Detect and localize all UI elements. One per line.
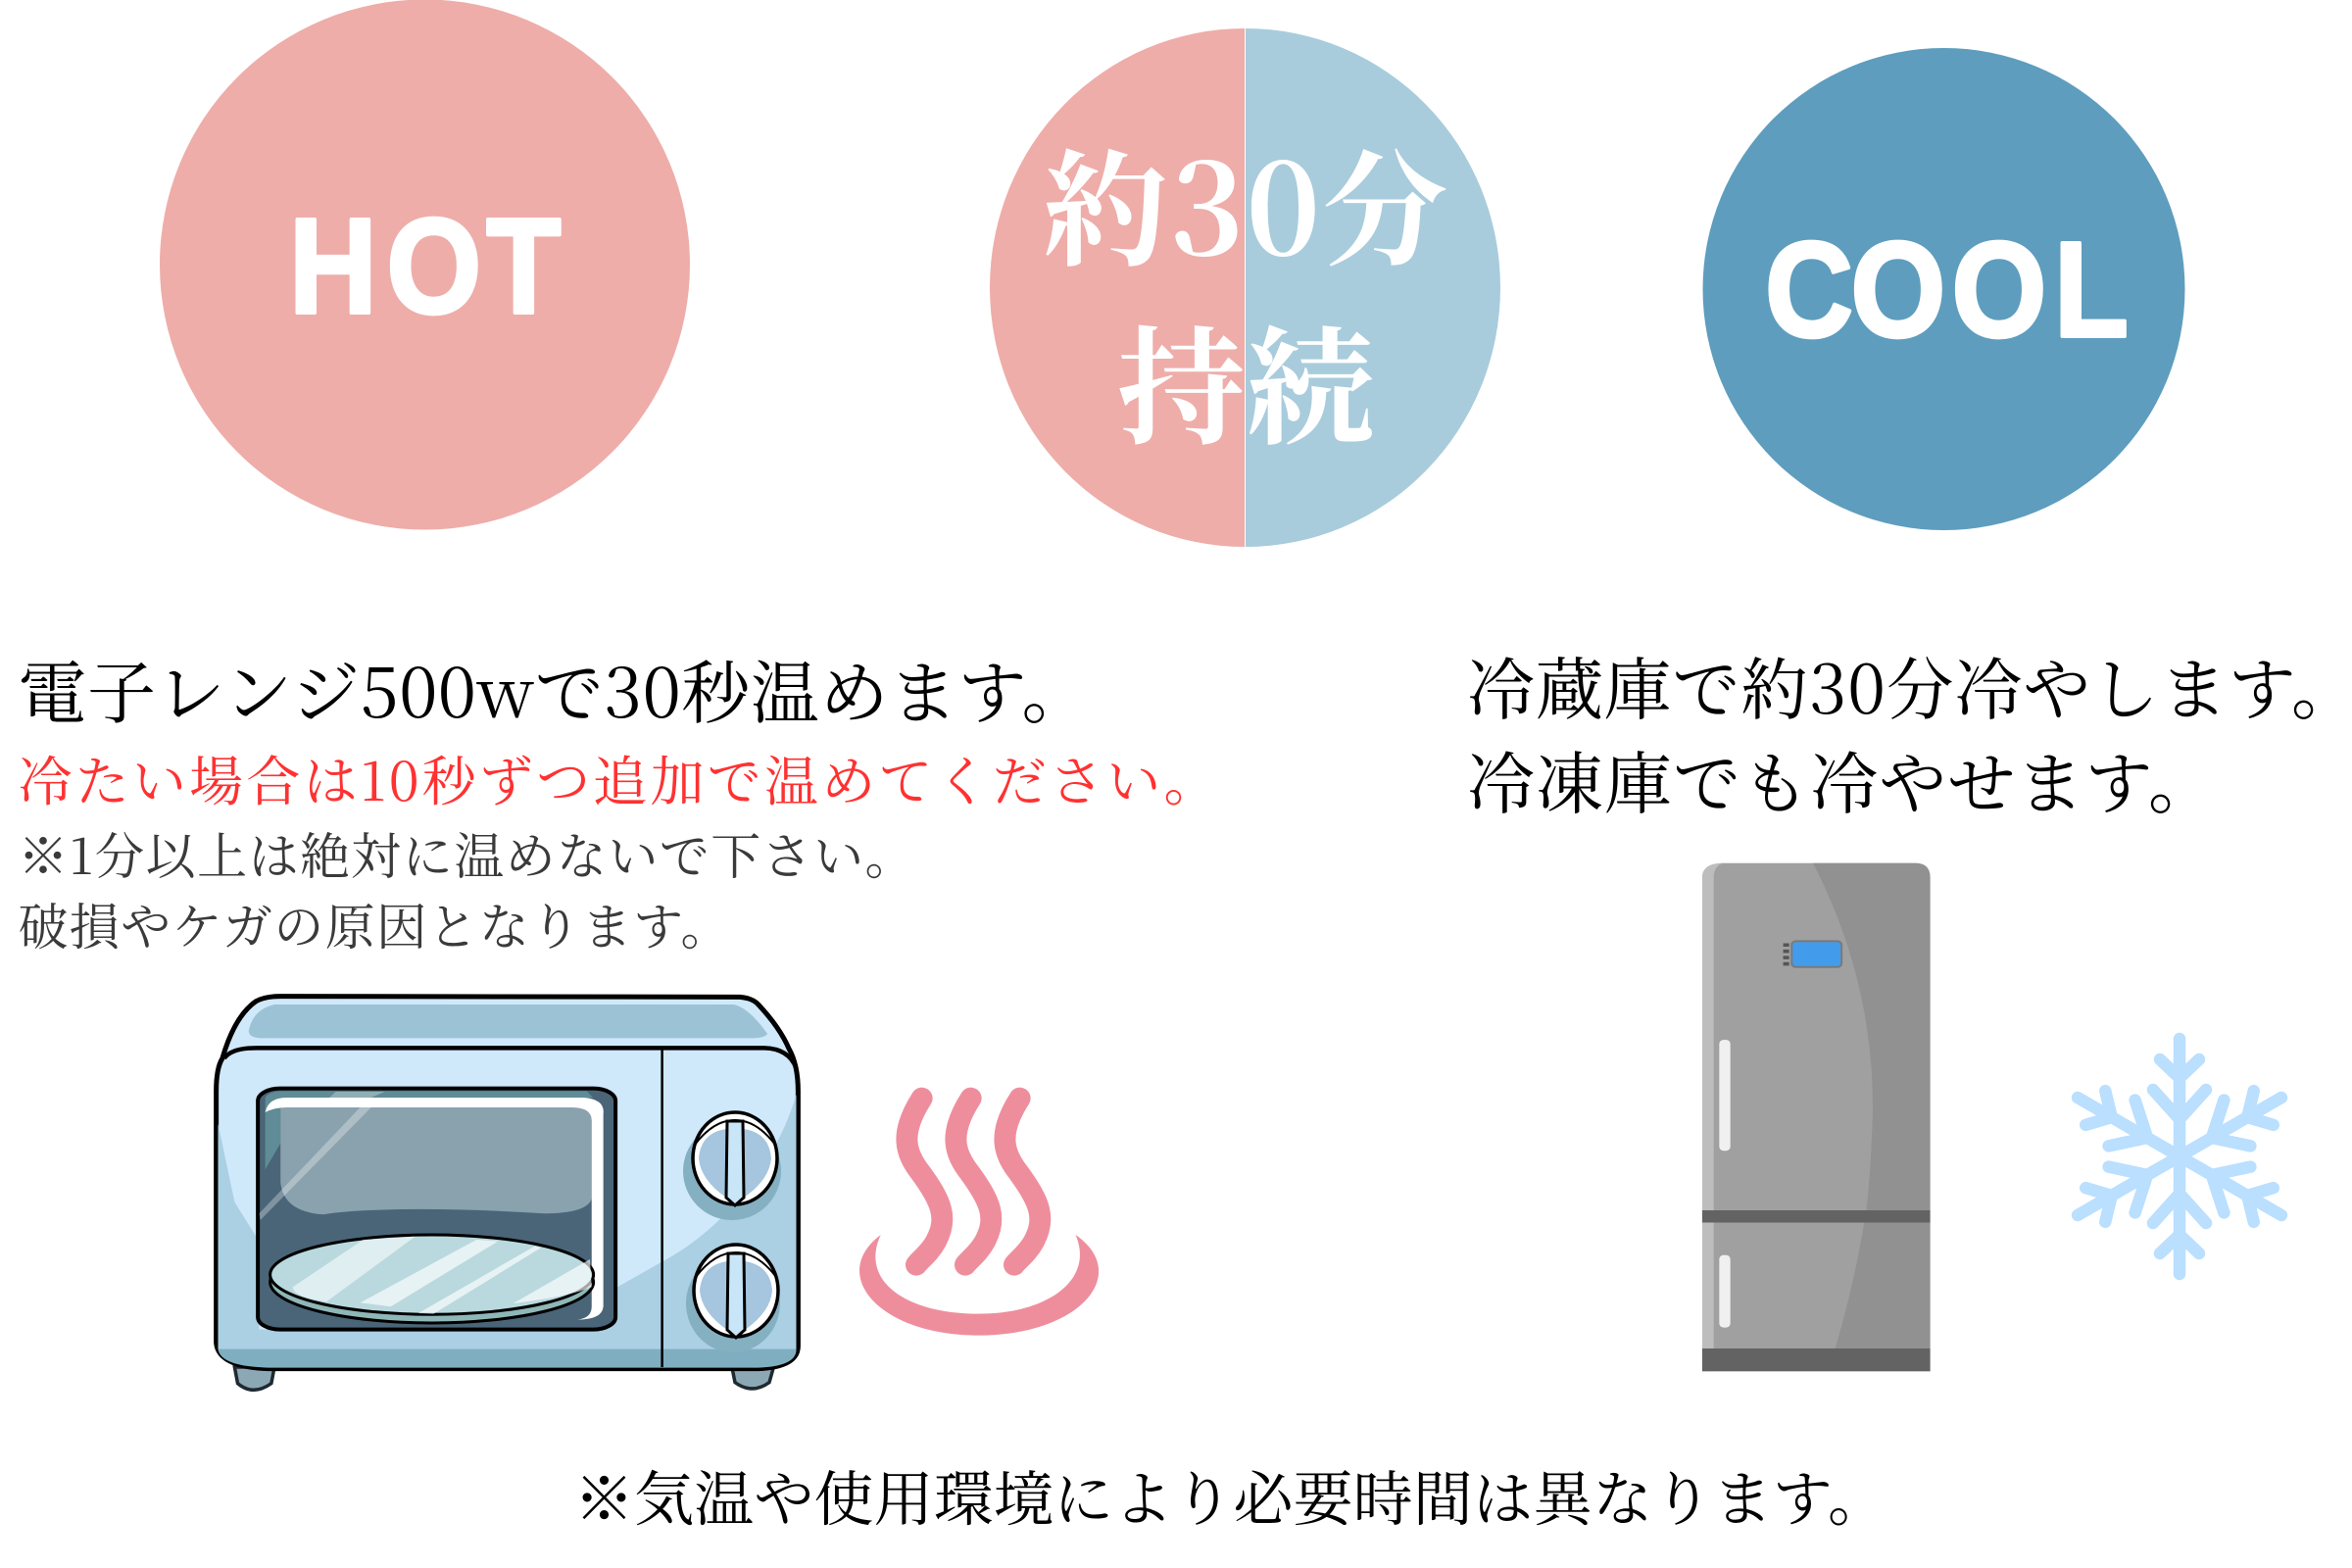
text block: heating instructions	[18, 639, 1217, 959]
badge: about 30 minutes duration: 約30分	[1043, 111, 1447, 291]
microwave body	[217, 997, 798, 1369]
microwave shading	[218, 1095, 796, 1349]
text block: cooling instructions	[1467, 636, 2352, 827]
microwave feet	[234, 1367, 773, 1390]
fridge bands	[1702, 1210, 1931, 1371]
badge: COOL	[1703, 48, 2185, 530]
microwave top panel	[249, 1004, 767, 1038]
badge: about 30 minutes duration	[990, 28, 1500, 547]
fridge body	[1702, 863, 1931, 1371]
text block: heating instructions: 冷たい場合は10秒ずつ追加で温めてください。	[18, 739, 1217, 816]
footnote: ※気温や使用環境により必要時間は異なります。	[574, 1452, 1887, 1538]
text block: cooling instructions: 冷蔵庫で約30分冷やします。	[1467, 636, 2352, 733]
text block: heating instructions: 電子レンジ500wで30秒温めます。	[18, 639, 1090, 738]
badge: about 30 minutes duration: 持続	[1117, 287, 1374, 470]
badge: COOL: COOL	[1765, 214, 2129, 365]
text block: cooling instructions: 冷凍庫でも冷やせます。	[1467, 730, 2216, 827]
icon: microwave oven	[217, 997, 798, 1390]
microwave window	[258, 1089, 615, 1330]
text block: heating instructions: ※1分以上は絶対に温めないで下さい。	[18, 816, 915, 889]
microwave knobs	[683, 1112, 781, 1352]
badge: HOT: HOT	[289, 190, 561, 341]
fridge handles	[1719, 1040, 1731, 1328]
icon: refrigerator	[1702, 863, 1931, 1371]
fridge display	[1784, 941, 1841, 967]
icon: snowflake	[2065, 1039, 2294, 1274]
badge: HOT	[160, 0, 690, 529]
icon: steam	[859, 1099, 1099, 1336]
text block: heating instructions: 破損やケガの原因となります。	[18, 887, 731, 959]
fridge door shade	[1813, 863, 1931, 1348]
microwave plate	[270, 1235, 594, 1323]
